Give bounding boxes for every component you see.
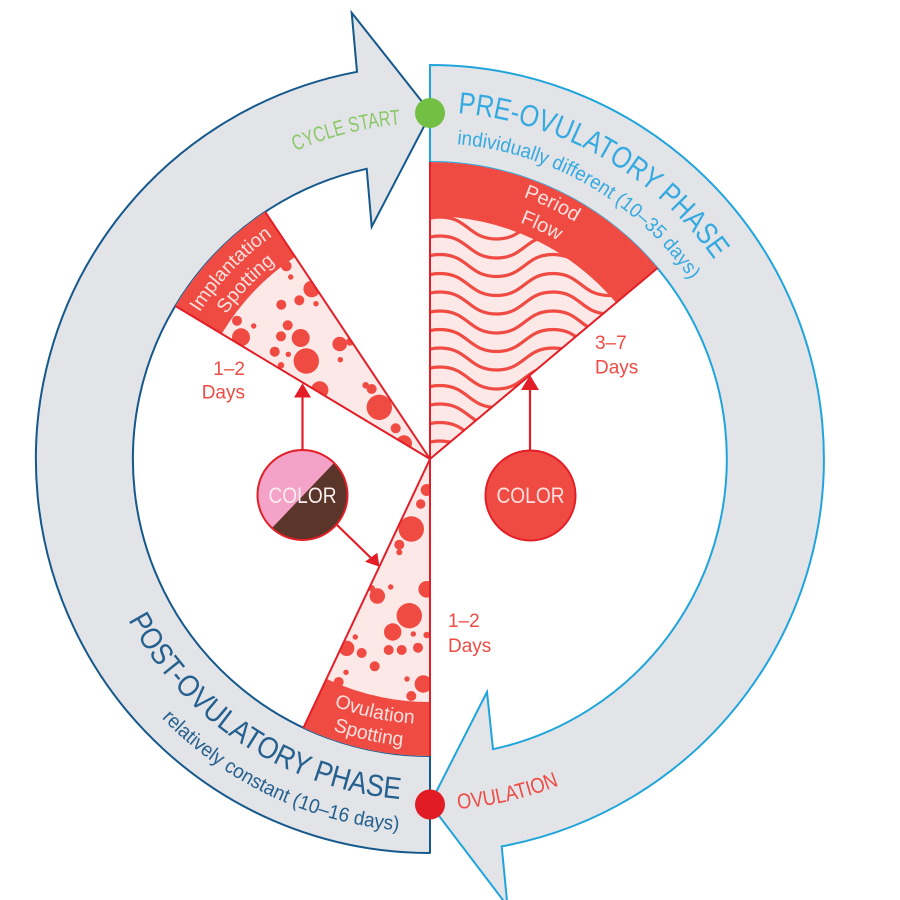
period outline [430, 162, 658, 459]
period pale field [430, 162, 658, 459]
ovulation label: Ovulation [336, 695, 414, 724]
post-ovulatory subtitle: relatively constant (10–16 days) [162, 712, 398, 834]
color swatch: red [486, 450, 576, 540]
implantation dots [232, 261, 412, 451]
implantation label: Implantation [189, 229, 272, 311]
duration: 3-7 days: 3–7 [595, 333, 627, 354]
ovulation dots [334, 484, 435, 701]
ovulation pale field [304, 459, 430, 756]
marker: cycle start dot [415, 98, 445, 128]
duration: ovulation 1-2 days: 1–2 [448, 611, 480, 632]
arrow: left color to ovulation wedge [336, 524, 380, 567]
pre-ovulatory heading: PRE-OVULATORY PHASE [460, 92, 730, 259]
duration: ovulation 1-2 days: Days [448, 636, 491, 657]
post-ovulatory heading: POST-OVULATORY PHASE [129, 612, 401, 799]
wedge: implantation spotting [174, 212, 429, 460]
post-ovulatory phase arrow [36, 13, 431, 853]
ovulation band [304, 679, 430, 756]
wedge: period flow [429, 162, 658, 460]
wedge: ovulation spotting [302, 459, 431, 756]
period label: Period [524, 184, 582, 222]
pre-ovulatory phase arrow [430, 65, 824, 900]
arrow: right color to period wedge [521, 375, 539, 451]
duration: implantation 1-2 days: 1–2 [213, 359, 245, 380]
period band [430, 162, 658, 303]
implantation pale field [175, 212, 430, 459]
spotting label: Spotting [218, 256, 276, 312]
implantation band [175, 212, 295, 334]
duration: 3-7 days: Days [595, 358, 638, 378]
spotting label: Spotting [334, 719, 402, 750]
cycle start label: CYCLE START [292, 110, 399, 150]
flow label: Flow [521, 210, 564, 240]
pre-ovulatory subtitle: individually different (10–35 days) [458, 130, 700, 279]
duration: implantation 1-2 days: Days [202, 382, 245, 404]
arrow: left color to implantation wedge [294, 383, 311, 451]
color swatch: pink and brown: COLOR [268, 483, 336, 508]
color swatch: pink and brown [256, 449, 348, 541]
color swatch: red: COLOR [496, 483, 564, 508]
ovulation label: OVULATION [458, 772, 558, 808]
marker: ovulation dot [415, 790, 445, 820]
implantation outline [175, 212, 430, 459]
period wave lines [431, 216, 650, 444]
ovulation outline [304, 459, 430, 756]
